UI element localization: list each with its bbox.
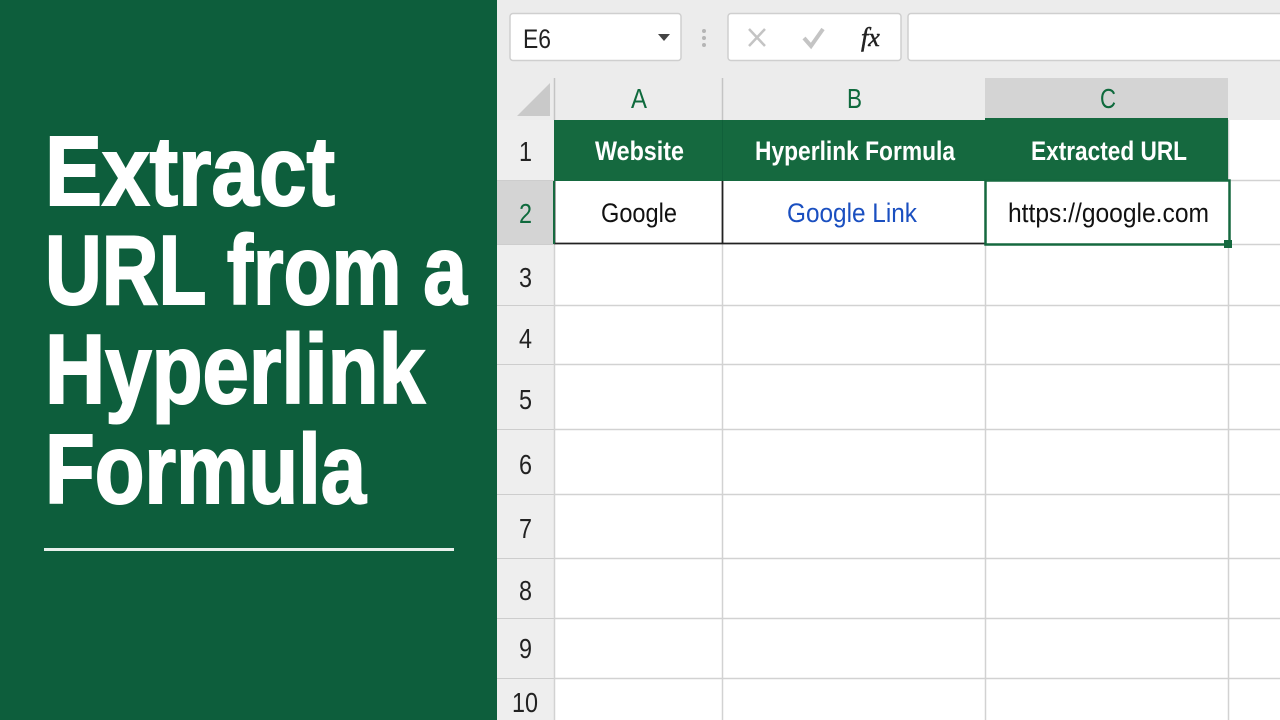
- title: [45, 116, 468, 524]
- panel: row headers: [497, 120, 554, 720]
- fill handle: [1224, 240, 1232, 248]
- name box: E6: [523, 24, 551, 54]
- panel: formula toolbar: [497, 0, 1280, 120]
- panel: column headers: [517, 78, 1228, 120]
- panel: row headers: 3: [519, 262, 532, 293]
- panel: row headers: 10: [512, 687, 538, 718]
- panel: row headers: 2: [519, 198, 532, 229]
- icon: toolbar dots: [702, 29, 706, 47]
- table data row: Google: [601, 198, 677, 228]
- panel: row headers: 1: [519, 136, 532, 167]
- table header row: Extracted URL: [1031, 136, 1187, 166]
- formula buttons: [728, 14, 901, 60]
- icon: confirm: [804, 29, 823, 46]
- panel: column headers: B: [847, 83, 862, 114]
- title: Hyperlink: [45, 314, 425, 424]
- title: Extract: [45, 116, 335, 226]
- name box: [510, 14, 681, 60]
- title underline: [44, 548, 454, 551]
- title: URL from a: [45, 215, 468, 325]
- panel: row headers: 4: [519, 323, 532, 354]
- panel: column headers: A: [631, 83, 647, 114]
- table data row: [554, 181, 985, 244]
- icon: cancel: [749, 29, 765, 46]
- icon: select all triangle: [517, 83, 550, 116]
- selected cell with URL: https://google.com: [1008, 198, 1209, 228]
- panel: row headers: 6: [519, 449, 532, 480]
- formula input: [908, 14, 1280, 60]
- table header row: [554, 118, 1228, 181]
- table data row: Google Link: [787, 198, 917, 228]
- title: Formula: [45, 414, 367, 524]
- panel: row headers: 7: [519, 513, 532, 544]
- panel: row headers: 8: [519, 575, 532, 606]
- panel: row headers: 5: [519, 384, 532, 415]
- panel: title background: [0, 0, 497, 720]
- table header row: Hyperlink Formula: [755, 136, 956, 166]
- icon: function: fx: [861, 23, 880, 52]
- panel: column headers: C: [1100, 83, 1116, 114]
- selected cell with URL: [986, 180, 1232, 248]
- table header row: Website: [595, 136, 684, 166]
- panel: row headers: 9: [519, 633, 532, 664]
- panel: spreadsheet background: [497, 0, 1280, 720]
- grid lines: [554, 120, 1280, 720]
